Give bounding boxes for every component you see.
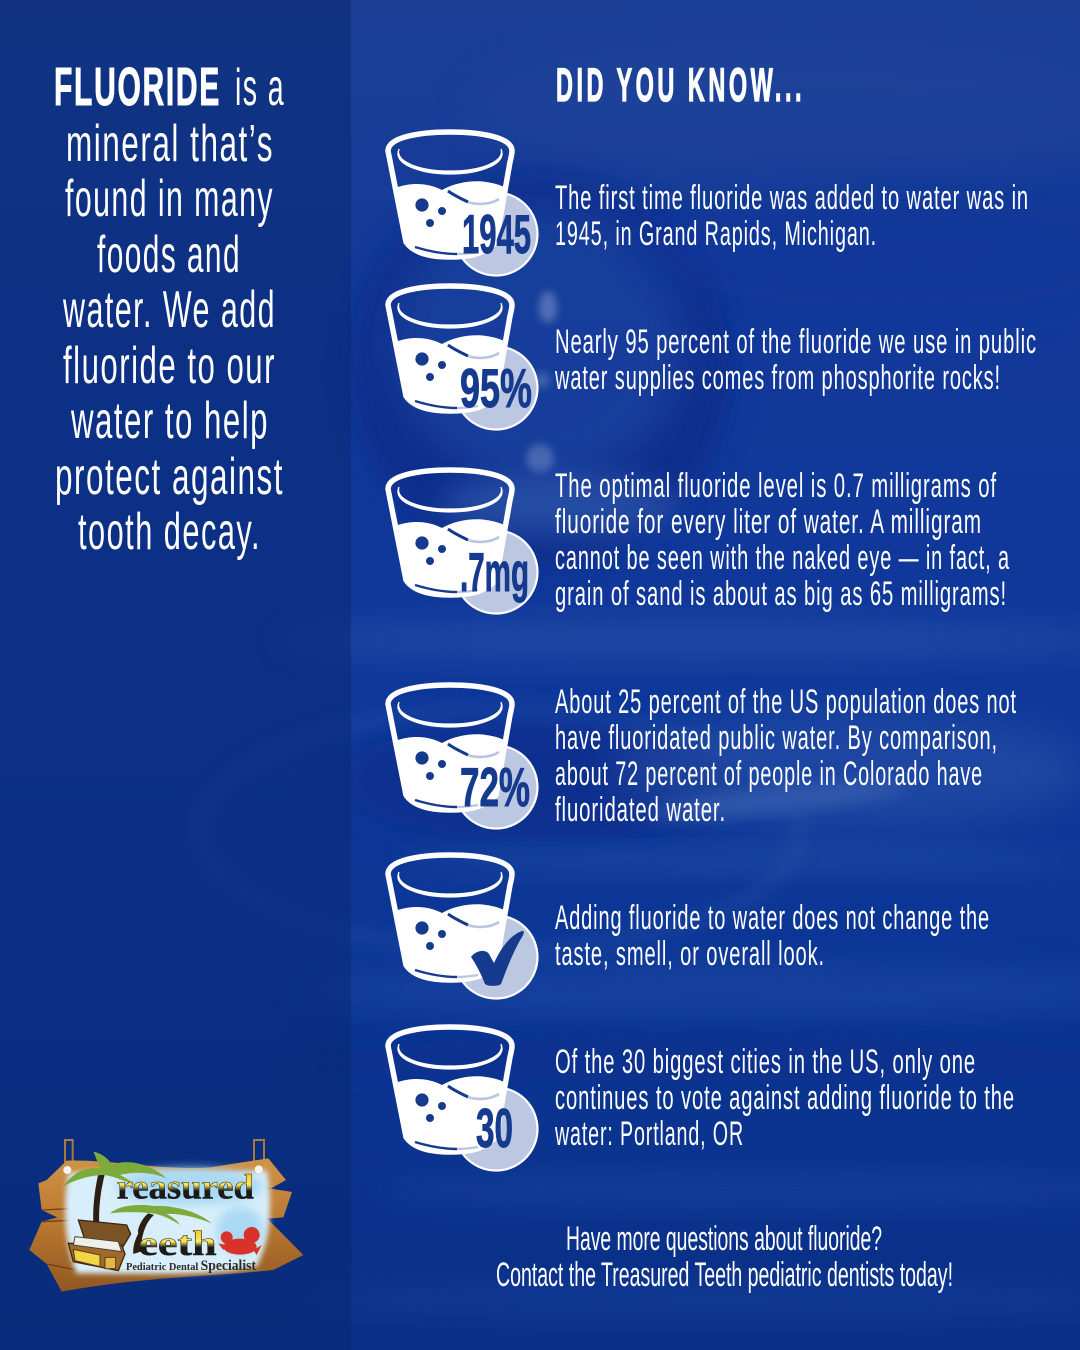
logo: Treasured Teeth sign xyxy=(29,1140,303,1292)
panel: left column overlay xyxy=(0,0,351,1350)
intro text block: FLUORIDE xyxy=(54,57,221,117)
logo: Treasured Teeth sign: reasured xyxy=(117,1167,255,1206)
logo: Treasured Teeth sign: Specialist xyxy=(201,1258,256,1274)
fact 3 icon: glass .7mg xyxy=(388,470,538,614)
intro text block: mineral that’s xyxy=(66,115,274,173)
intro text block: tooth decay. xyxy=(78,503,261,561)
intro text block: foods and xyxy=(97,226,241,284)
fact 6 text: water: Portland, OR xyxy=(554,1115,744,1153)
intro text block: fluoride to our xyxy=(63,337,276,395)
fact 4 text xyxy=(555,683,1017,829)
fact 2 text xyxy=(554,323,1037,397)
fact 1 icon: glass 1945: 1945 xyxy=(462,203,531,265)
fact 6 text xyxy=(554,1043,1015,1153)
fact 6 icon: glass 30: 30 xyxy=(476,1097,513,1159)
intro text block: found in many xyxy=(65,170,274,228)
fact 1 text xyxy=(555,179,1029,253)
text: DID YOU KNOW... xyxy=(556,58,805,111)
fact 5 text: taste, smell, or overall look. xyxy=(555,935,825,973)
fact 5 text xyxy=(555,899,990,973)
fact 1 icon: glass 1945 xyxy=(388,132,538,276)
fact 6 icon: glass 30 xyxy=(388,1027,538,1170)
fact 3 text xyxy=(555,467,1010,613)
intro text block: water. We add xyxy=(62,281,276,339)
intro text block: protect against xyxy=(55,448,284,506)
fact 5 icon: glass checkmark xyxy=(388,855,538,998)
intro text block: is a xyxy=(235,59,285,117)
intro text block xyxy=(54,57,285,561)
fact 4 text: fluoridated water. xyxy=(555,791,726,829)
fact 3 icon: glass .7mg: .7mg xyxy=(460,541,529,603)
logo: Treasured Teeth sign: Pediatric Dental xyxy=(126,1262,198,1273)
fact 2 icon: glass 95% xyxy=(388,286,538,430)
fact 4 icon: glass 72% xyxy=(388,685,538,828)
fact 2 icon: glass 95%: 95% xyxy=(460,357,532,419)
intro text block: water to help xyxy=(70,392,269,450)
logo: Treasured Teeth sign: eeth xyxy=(138,1224,217,1263)
footer call to action xyxy=(496,1220,953,1294)
fact 4 icon: glass 72%: 72% xyxy=(460,756,530,818)
